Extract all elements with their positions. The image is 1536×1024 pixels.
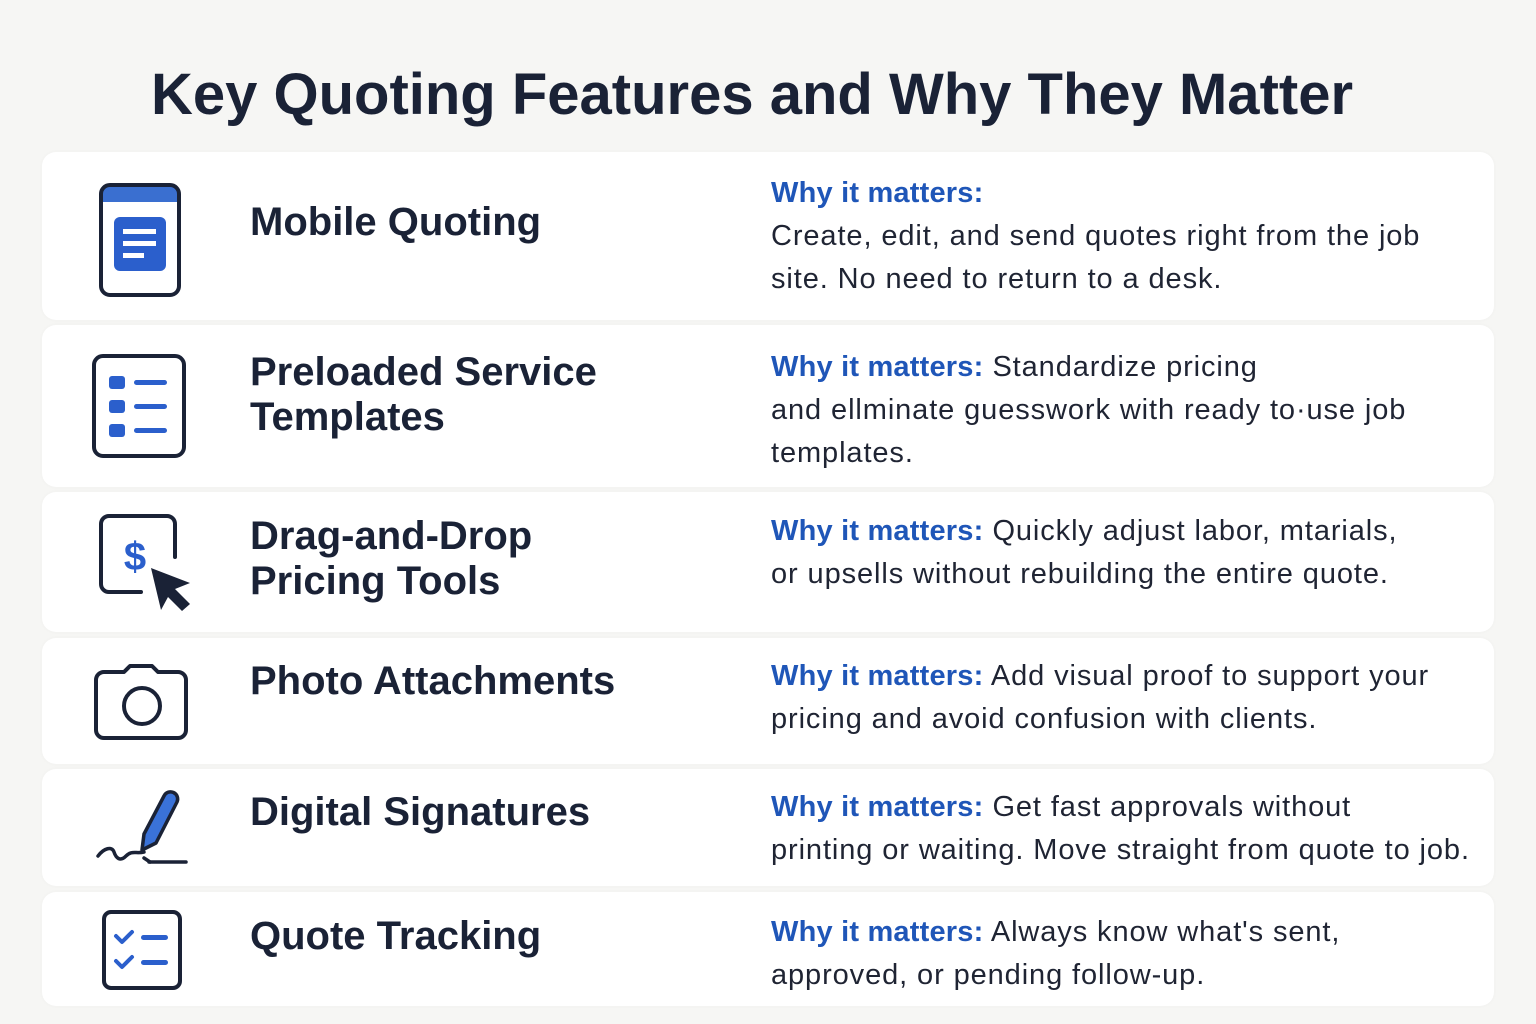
heading: templates bbox=[250, 350, 597, 439]
icon: camera bbox=[94, 664, 188, 740]
text: mobile why bbox=[771, 177, 1420, 295]
panel: templates bbox=[42, 325, 1494, 487]
icon: dollar with cursor: $ bbox=[124, 535, 146, 579]
heading: Mobile Quoting: Mobile Quoting bbox=[250, 200, 541, 244]
text: templates why: templates. bbox=[771, 437, 914, 469]
text: mobile why: site. No need to return to a desk. bbox=[771, 263, 1222, 295]
icon: mobile document bbox=[99, 183, 181, 297]
icon: pen signature bbox=[96, 790, 188, 864]
text: signatures why: Why it matters: Get fast approvals without bbox=[771, 791, 1351, 823]
panel: photo bbox=[42, 638, 1494, 764]
text: templates why bbox=[771, 351, 1406, 469]
icon: dollar with cursor bbox=[99, 514, 190, 611]
text: tracking why: approved, or pending follow-up. bbox=[771, 959, 1205, 991]
text: templates why: Why it matters: Standardize pricing bbox=[771, 351, 1258, 383]
icon: template list bbox=[92, 354, 186, 458]
heading: pricing: Drag-and-Drop bbox=[250, 514, 532, 558]
text: signatures why: printing or waiting. Move straight from quote to job. bbox=[771, 834, 1470, 866]
panel: mobile quoting bbox=[42, 152, 1494, 320]
text: templates why: and ellminate guesswork with ready to·use job bbox=[771, 394, 1406, 426]
text: photo why: Why it matters: Add visual proof to support your bbox=[771, 660, 1429, 692]
text: pricing why bbox=[771, 515, 1397, 590]
heading: pricing bbox=[250, 514, 532, 603]
heading: templates: Preloaded Service bbox=[250, 350, 597, 394]
text: photo why: pricing and avoid confusion with clients. bbox=[771, 703, 1317, 735]
text: mobile why: Why it matters: bbox=[771, 177, 983, 209]
heading: templates: Templates bbox=[250, 395, 445, 439]
heading: tracking: Quote Tracking bbox=[250, 914, 541, 958]
text: pricing why: Why it matters: Quickly adjust labor, mtarials, bbox=[771, 515, 1397, 547]
panel: signatures bbox=[42, 769, 1494, 886]
text: photo why bbox=[771, 660, 1429, 735]
panel: tracking bbox=[42, 892, 1494, 1006]
heading: photo: Photo Attachments bbox=[250, 659, 615, 703]
panel: pricing bbox=[42, 492, 1494, 632]
heading: signatures: Digital Signatures bbox=[250, 790, 590, 834]
text: pricing why: or upsells without rebuilding the entire quote. bbox=[771, 558, 1389, 590]
text: tracking why bbox=[771, 916, 1340, 991]
icon: checklist bbox=[102, 910, 182, 990]
text: signatures why bbox=[771, 791, 1470, 866]
text: tracking why: Why it matters: Always know what's sent, bbox=[771, 916, 1340, 948]
title: Key Quoting Features and Why They Matter bbox=[151, 62, 1353, 127]
text: mobile why: Create, edit, and send quotes right from the job bbox=[771, 220, 1420, 252]
heading: pricing: Pricing Tools bbox=[250, 559, 500, 603]
